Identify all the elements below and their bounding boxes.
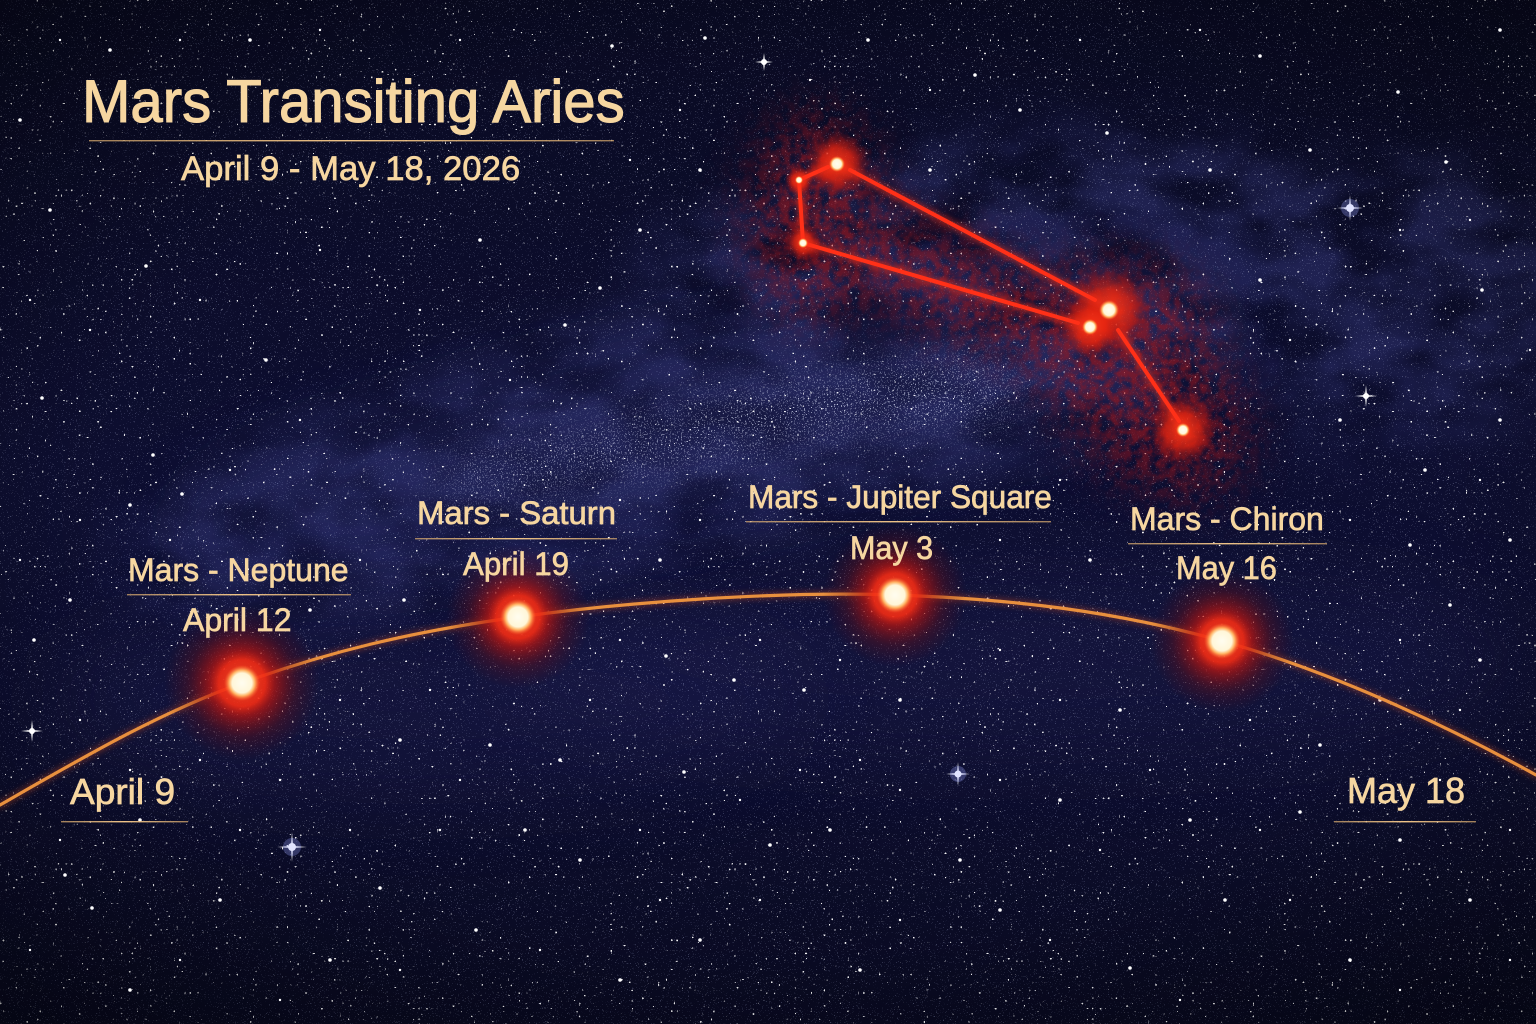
label: Mars - Saturn: April 19 xyxy=(463,546,569,582)
label: Mars - Chiron: Mars - Chiron xyxy=(1130,501,1324,537)
title: Mars Transiting Aries xyxy=(82,68,625,135)
ecliptic arc xyxy=(0,594,1536,805)
label: Mars - Chiron: May 16 xyxy=(1176,550,1277,586)
label: May 18 end: May 18 xyxy=(1347,770,1465,811)
red nebula around constellation xyxy=(753,115,1279,529)
event: Mars - Chiron marker xyxy=(1150,569,1294,713)
label: Mars - Saturn: Mars - Saturn xyxy=(417,495,616,531)
title rule xyxy=(89,140,614,141)
milky way band xyxy=(40,109,1536,790)
star glows xyxy=(785,132,1217,464)
date range: April 9 - May 18, 2026 xyxy=(181,150,520,188)
event: Mars - Saturn marker xyxy=(446,545,590,689)
label: April 9 start xyxy=(61,771,188,822)
label: Mars - Neptune xyxy=(127,552,351,638)
label: April 9 start: April 9 xyxy=(70,771,175,812)
label: Mars - Jupiter Square: Mars - Jupiter Square xyxy=(748,479,1052,515)
constellation lines xyxy=(799,164,1183,430)
label: Mars - Chiron xyxy=(1128,501,1327,586)
event: Mars - Neptune marker xyxy=(164,605,320,761)
event: Mars - Jupiter Square marker xyxy=(823,523,967,667)
title block xyxy=(82,68,625,188)
label: Mars - Jupiter Square xyxy=(746,479,1052,566)
sparkle: lower left xyxy=(277,832,307,862)
sparkle: left edge xyxy=(21,720,43,742)
sparkle: upper right xyxy=(1337,195,1363,221)
sparkle: bottom center xyxy=(946,762,970,786)
label: Mars - Neptune: Mars - Neptune xyxy=(128,552,349,588)
label: Mars - Jupiter Square: May 3 xyxy=(850,530,933,566)
label: Mars - Saturn xyxy=(415,495,617,582)
sparkle stars xyxy=(21,53,1377,862)
sparkle: right xyxy=(1355,385,1377,407)
constellation: Aries xyxy=(753,115,1279,529)
sparkle: top xyxy=(755,53,773,71)
constellation star cores xyxy=(795,156,1190,437)
label: Mars - Neptune: April 12 xyxy=(183,602,292,638)
